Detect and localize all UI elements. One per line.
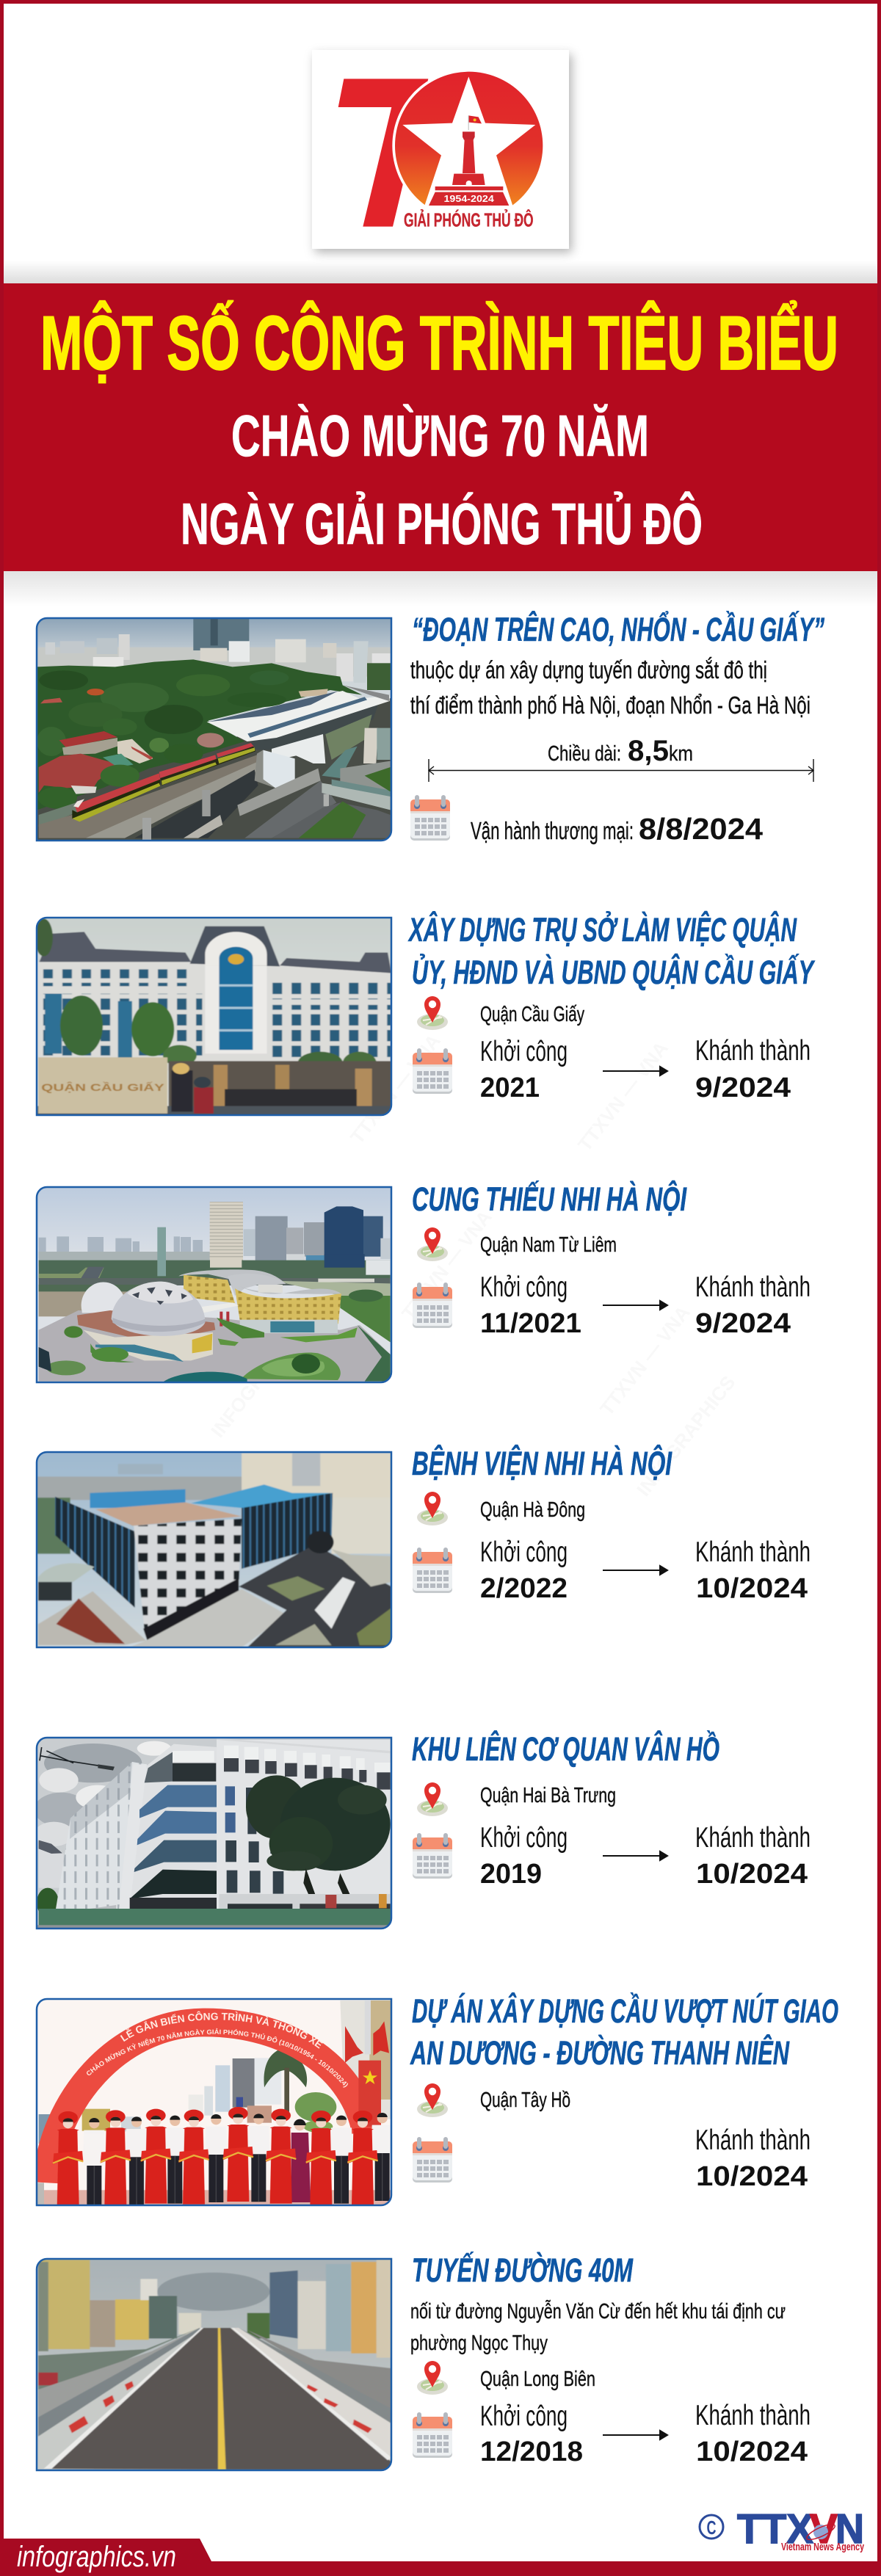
- start date: 2021: [480, 1073, 540, 1103]
- logo card: 70 years Liberation of the Capital: GIẢI PHÓNG THỦ ĐÔ: [404, 208, 534, 231]
- panel: An Dương - Thanh Niên overpass: [35, 1992, 838, 2207]
- panel: Cầu Giấy district headquarters: [34, 911, 816, 1117]
- start date: Khởi công: [480, 1536, 568, 1568]
- heading: TUYẾN ĐƯỜNG 40M: [412, 2252, 634, 2289]
- completion date: Khánh thành: [695, 1822, 811, 1854]
- icon: calendar: [413, 1282, 452, 1328]
- heading: BỆNH VIỆN NHI HÀ NỘI: [412, 1445, 672, 1482]
- completion date: Khánh thành: [695, 1536, 811, 1568]
- text: TTXVN — VNA: [595, 1302, 695, 1420]
- photo: district office building: QUẬN CẦU GIẤY: [41, 1081, 164, 1093]
- icon: location pin: [417, 996, 448, 1030]
- start date: [480, 1536, 568, 1604]
- completion date: 10/2024: [696, 2161, 808, 2192]
- icon: calendar: [413, 1048, 452, 1094]
- start date: 2/2022: [480, 1573, 568, 1604]
- description: [410, 656, 811, 719]
- heading: CUNG THIẾU NHI HÀ NỘI: [412, 1180, 687, 1218]
- dimension arrow: [429, 759, 813, 782]
- icon: calendar: [413, 2412, 452, 2458]
- text: TTXVN — VNA: [346, 1030, 445, 1148]
- completion date: Khánh thành: [695, 2125, 811, 2156]
- agency wordmark: [737, 2506, 864, 2553]
- title line 2: CHÀO MỪNG 70 NĂM: [231, 403, 649, 468]
- agency wordmark: N: [835, 2506, 864, 2553]
- copyright mark: [700, 2515, 723, 2539]
- location: Quận Long Biên: [480, 2368, 595, 2391]
- location: Quận Nam Từ Liêm: [480, 1233, 617, 1257]
- footer site name: infographics.vn: [17, 2541, 176, 2573]
- icon: calendar: [413, 2137, 452, 2183]
- icon: location pin: [417, 2361, 448, 2395]
- completion date: [695, 1271, 811, 1339]
- operation date: Vận hành thương mại:: [471, 817, 634, 844]
- completion date: 10/2024: [696, 1859, 808, 1890]
- logo card: 70 years Liberation of the Capital: [312, 50, 572, 253]
- arrow: [603, 1851, 667, 1860]
- operation date: 8/8/2024: [639, 812, 763, 846]
- photo: ribbon cutting under red arch: CHÀO MỪNG KỶ NIỆM 70 NĂM NGÀY GIẢI PHÓNG THỦ ĐÔ (10/10/1954 - 10/10/2024): [87, 2028, 348, 2088]
- start date: [480, 1271, 581, 1339]
- photo: ribbon cutting under red arch: LỄ GẮN BIỂN CÔNG TRÌNH VÀ THÔNG XE: [120, 2011, 323, 2049]
- icon: location pin: [417, 1492, 448, 1525]
- panel: Hanoi Children's Hospital: [34, 1445, 811, 1650]
- photo: new road: [34, 2255, 394, 2472]
- completion date: Khánh thành: [695, 1035, 811, 1067]
- operation date: [471, 812, 763, 846]
- agency wordmark: V: [810, 2506, 838, 2553]
- photo: office complex: [35, 1736, 393, 1930]
- text: INFOGRAPHICS: [632, 1371, 739, 1501]
- icon: location pin: [417, 1782, 448, 1816]
- completion date: [695, 1536, 811, 1604]
- arrow: [603, 1301, 667, 1310]
- length label: [548, 735, 693, 767]
- completion date: Khánh thành: [695, 2400, 811, 2431]
- banner: main title: [0, 283, 881, 571]
- copyright mark: C: [706, 2517, 717, 2539]
- length label: 8,5: [628, 735, 669, 767]
- completion date: 10/2024: [696, 1573, 808, 1604]
- start date: Khởi công: [480, 2401, 568, 2432]
- panel: Nhổn - Cầu Giấy elevated section: [37, 611, 824, 846]
- arrow: [603, 1067, 667, 1075]
- description: [410, 2299, 786, 2355]
- completion date: [695, 1822, 811, 1890]
- text: TTXVN — VNA: [397, 1206, 496, 1324]
- start date: [480, 1822, 568, 1890]
- start date: [480, 1036, 568, 1103]
- completion date: [695, 2400, 811, 2467]
- completion date: [695, 2125, 811, 2192]
- bottom shadow band: [4, 571, 877, 606]
- panel: Hanoi Children's Palace: [37, 1180, 811, 1384]
- heading: KHU LIÊN CƠ QUAN VÂN HỒ: [412, 1730, 719, 1768]
- photo: district office building: [34, 917, 394, 1117]
- icon: calendar: [413, 1833, 452, 1879]
- photo: hospital: [34, 1448, 394, 1650]
- panel: 40m road: [34, 2252, 811, 2472]
- start date: Khởi công: [480, 1036, 568, 1067]
- heading: [407, 911, 816, 991]
- start date: Khởi công: [480, 1822, 568, 1854]
- photo: ribbon cutting under red arch: [35, 1998, 392, 2207]
- completion date: [695, 1035, 811, 1103]
- agency wordmark: TTX: [737, 2506, 813, 2553]
- start date: 2019: [480, 1859, 542, 1890]
- completion date: 9/2024: [695, 1073, 791, 1103]
- start date: Khởi công: [480, 1271, 568, 1303]
- panel: Vân Hồ agency complex: [35, 1730, 811, 1930]
- icon: location pin: [417, 1227, 448, 1261]
- photo: children's palace: [37, 1186, 393, 1384]
- text: TTXVN — VNA: [573, 1037, 672, 1155]
- length label: km: [669, 742, 693, 766]
- icon: location pin: [417, 2083, 448, 2117]
- text: INFOGRAPHICS: [206, 1313, 313, 1442]
- completion date: 10/2024: [696, 2437, 808, 2467]
- completion date: 9/2024: [695, 1308, 791, 1339]
- icon: calendar: [410, 795, 450, 841]
- completion date: Khánh thành: [695, 1271, 811, 1303]
- photo: metro train and elevated station: [37, 617, 393, 841]
- arrow: [603, 2431, 667, 2439]
- description: phường Ngọc Thụy: [410, 2332, 548, 2355]
- start date: 12/2018: [480, 2437, 583, 2467]
- start date: [480, 2401, 583, 2467]
- start date: 11/2021: [480, 1308, 581, 1339]
- copyright logo TTXVN: [700, 2506, 864, 2553]
- location: Quận Tây Hồ: [480, 2089, 570, 2112]
- heading: [410, 1992, 838, 2072]
- icon: calendar: [413, 1548, 452, 1593]
- location: Quận Hà Đông: [480, 1498, 585, 1522]
- logo card: 70 years Liberation of the Capital: 1954-2024: [443, 194, 494, 204]
- length label: Chiều dài:: [548, 742, 621, 766]
- arrow: [603, 1566, 667, 1575]
- location: Quận Hai Bà Trưng: [480, 1784, 616, 1807]
- location: Quận Cầu Giấy: [480, 1003, 584, 1026]
- top shadow band: [4, 261, 877, 283]
